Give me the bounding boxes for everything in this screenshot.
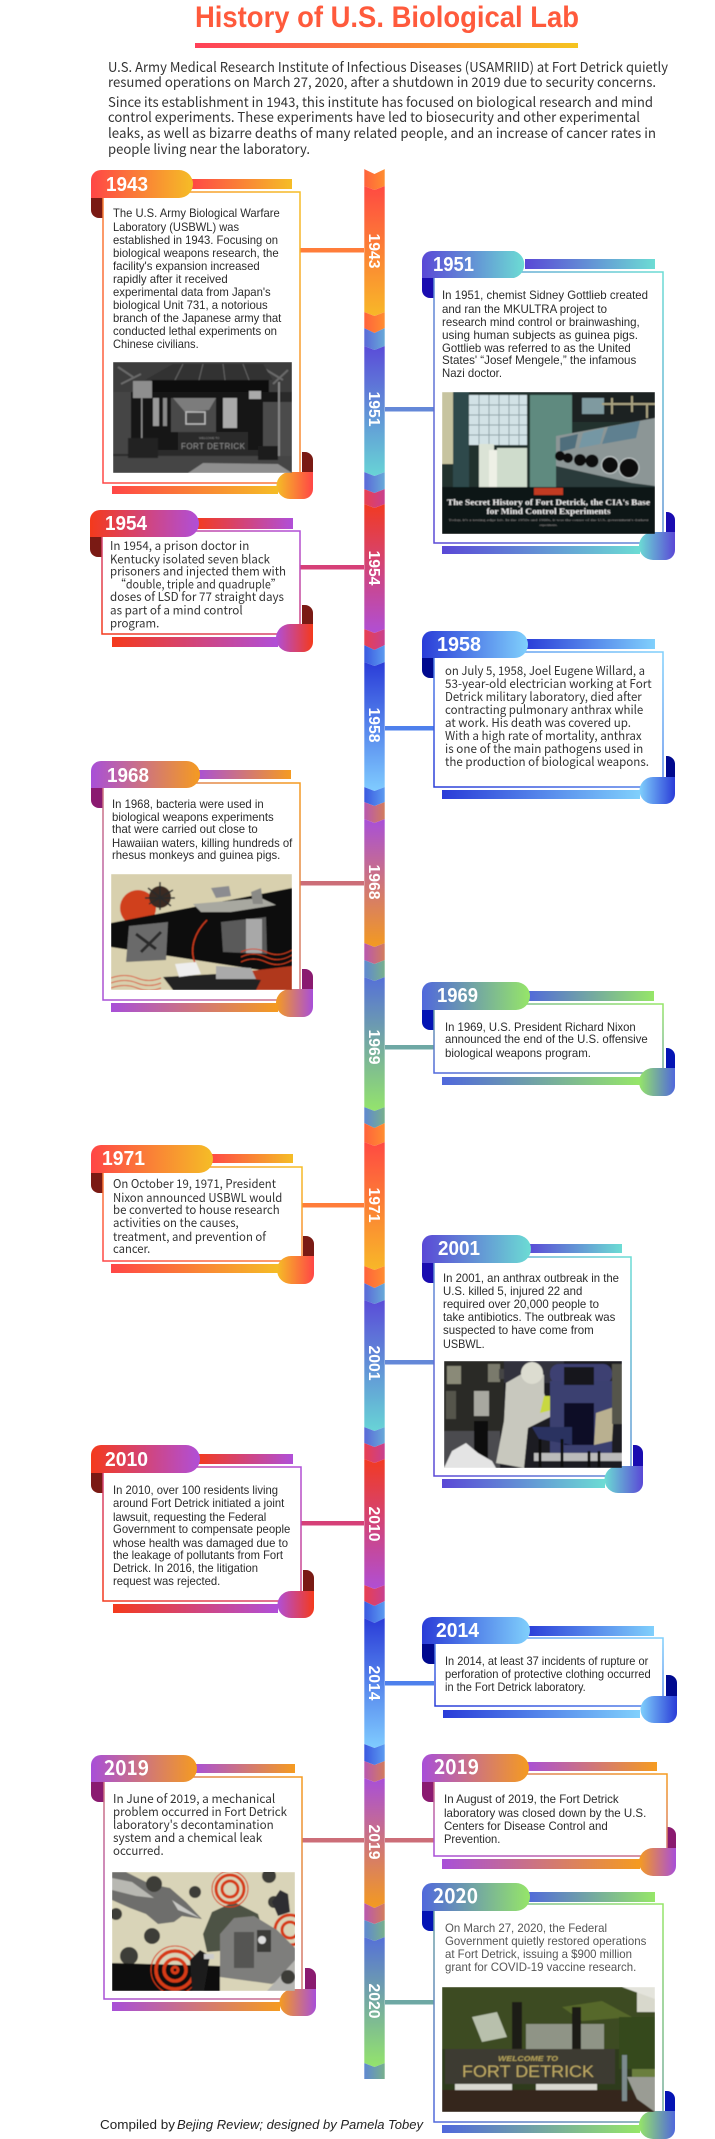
text 1969: announced the end of the U.S. offensive xyxy=(445,1032,648,1046)
text 1951: using human subjects as guinea pigs. xyxy=(442,328,638,342)
text 1958: Detrick military laboratory, died after xyxy=(445,688,642,705)
photo: laboratory glove boxes with headline: for Mind Control Experiments xyxy=(486,507,610,516)
year tab 2020 xyxy=(422,1880,530,1911)
text 2019 right: Centers for Disease Control and xyxy=(444,1819,608,1833)
panel: 1971 xyxy=(91,1145,314,1284)
year tab 1951 xyxy=(422,251,524,278)
intro text: Since its establishment in 1943, this institute has focused on biological research and mind xyxy=(108,91,653,111)
text 1971 xyxy=(113,1175,282,1257)
year tab 2019 left xyxy=(91,1752,197,1782)
text 2001: suspected to have come from xyxy=(443,1323,594,1337)
text 1971: On October 19, 1971, President xyxy=(113,1175,276,1192)
year tab 2014 xyxy=(422,1617,530,1644)
year tab 1954 xyxy=(90,510,199,537)
year tab 1954: 1954 xyxy=(105,513,148,535)
title: History of U.S. Biological Lab xyxy=(195,1,579,34)
text 1971: Nixon announced USBWL would xyxy=(113,1189,282,1206)
photo: laboratory glove boxes with headline: The Secret History of Fort Detrick, the CIA's Base xyxy=(447,498,651,507)
text 2019 left xyxy=(113,1790,287,1859)
panel: 2019 left xyxy=(91,1752,316,2016)
text 1954: Kentucky isolated seven black xyxy=(110,550,270,567)
text 1968: biological weapons experiments xyxy=(112,810,274,824)
text 2014: In 2014, at least 37 incidents of rupture or xyxy=(445,1654,648,1668)
panel: 1969 xyxy=(422,982,675,1096)
text 1958: contracting pulmonary anthrax while xyxy=(445,701,644,718)
year tab 2019 right xyxy=(422,1751,529,1782)
text 2014: perforation of protective clothing occurred xyxy=(445,1667,651,1681)
year tab 1958: 1958 xyxy=(437,634,481,656)
spine segment 2019: 2019 xyxy=(365,1824,382,1860)
year tab 1969 xyxy=(422,982,530,1010)
text 1954: program. xyxy=(110,615,159,632)
text 2010: whose health was damaged due to xyxy=(112,1536,288,1550)
collage: virus, plane and ship xyxy=(111,874,292,990)
spine segment 2010 xyxy=(364,1443,385,1606)
text 1954: In 1954, a prison doctor in xyxy=(110,537,249,554)
panel: 2019 right xyxy=(422,1751,676,1876)
spine segment 1958: 1958 xyxy=(365,708,382,743)
text 2010: Government to compensate people xyxy=(113,1522,291,1536)
text 2010: the leakage of pollutants from Fort xyxy=(113,1548,284,1562)
text 2020: Government quietly restored operations xyxy=(445,1934,646,1948)
spine segment 2019 xyxy=(364,1761,385,1924)
spine segment 1969: 1969 xyxy=(365,1030,382,1065)
text 1951: Gottlieb was referred to as the United xyxy=(442,341,631,355)
photo: Welcome to Fort Detrick sign xyxy=(442,1987,655,2112)
text 1958: With a high rate of mortality, anthrax xyxy=(445,727,642,744)
text 2014 xyxy=(445,1654,651,1694)
text 1943: experimental data from Japan's xyxy=(113,285,271,299)
text 2019 right xyxy=(444,1792,646,1846)
photo: laboratory glove boxes with headline xyxy=(442,392,655,534)
spine segment 2010: 2010 xyxy=(365,1506,382,1542)
spine segment 2001 xyxy=(364,1283,385,1447)
photo: Welcome to Fort Detrick sign: WELCOME TO xyxy=(498,2054,558,2063)
text 1958 xyxy=(445,662,652,770)
text 2014: in the Fort Detrick laboratory. xyxy=(445,1680,586,1694)
spine segment 2020 xyxy=(364,1920,385,2079)
text 2001: In 2001, an anthrax outbreak in the xyxy=(443,1271,619,1285)
panel: 1951 xyxy=(422,251,675,560)
text 1968: rhesus monkeys and guinea pigs. xyxy=(112,848,280,862)
photo: Welcome to Fort Detrick sign: FORT DETRICK xyxy=(462,2062,595,2081)
text 1954: prisoners and injected them with xyxy=(110,563,286,580)
text 2019 left: system and a chemical leak xyxy=(113,1829,263,1846)
text 2010: Detrick. In 2016, the litigation xyxy=(113,1561,258,1575)
text 2019 left: problem occurred in Fort Detrick xyxy=(113,1803,287,1820)
panel: 2020 xyxy=(422,1880,675,2139)
text 1943: facility's expansion increased xyxy=(113,259,260,273)
text 1954 xyxy=(110,537,286,632)
text 2010 xyxy=(112,1483,291,1588)
spine segment 1971 xyxy=(364,1123,385,1288)
text 1969: biological weapons program. xyxy=(445,1046,591,1060)
year tab 1971 xyxy=(91,1145,213,1173)
text 1958: at work. His death was covered up. xyxy=(445,714,631,731)
year tab 1971: 1971 xyxy=(102,1148,145,1170)
text 2001: USBWL. xyxy=(443,1337,485,1351)
text 1951: and ran the MKULTRA project to xyxy=(442,302,607,316)
year tab 1951: 1951 xyxy=(433,254,474,276)
photo: laboratory glove boxes with headline: experiments. xyxy=(540,523,558,527)
year tab 2019 right: 2019 xyxy=(434,1751,479,1780)
spine segment 1951 xyxy=(364,328,385,493)
timeline spine xyxy=(364,169,385,2079)
text 1943: The U.S. Army Biological Warfare xyxy=(113,206,280,220)
text 1943: rapidly after it received xyxy=(113,272,228,286)
spine segment 1954: 1954 xyxy=(365,550,382,586)
text 2001: take antibiotics. The outbreak was xyxy=(443,1310,615,1324)
text 2019 left: In June of 2019, a mechanical xyxy=(113,1790,275,1807)
spine segment 2001: 2001 xyxy=(365,1346,382,1381)
spine segment 1951: 1951 xyxy=(365,392,382,427)
text 2020: at Fort Detrick, issuing a $900 million xyxy=(445,1947,632,1961)
photo: Fort Detrick gate in black and white: WELCOME TO xyxy=(199,436,220,440)
text 1943: branch of the Japanese army that xyxy=(113,311,282,325)
panel: 1943 xyxy=(91,170,313,499)
spine segment 2014 xyxy=(364,1601,385,1765)
text 1971: cancer. xyxy=(113,1240,150,1257)
spine segment 1958 xyxy=(364,645,385,806)
spine segment 1943: 1943 xyxy=(365,234,382,269)
text 1969: In 1969, U.S. President Richard Nixon xyxy=(445,1020,636,1034)
text 2020: grant for COVID-19 vaccine research. xyxy=(445,1960,636,1974)
spine segment 1968 xyxy=(364,802,385,964)
text 1951: Nazi doctor. xyxy=(442,366,502,380)
text 1954: doses of LSD for 77 straight days xyxy=(110,588,284,605)
text 1951: research mind control or brainwashing, xyxy=(442,315,640,329)
year tab 2014: 2014 xyxy=(436,1620,480,1642)
year tab 1968 xyxy=(91,761,200,788)
text 1943: biological Unit 731, a notorious xyxy=(113,298,268,312)
text 1958: on July 5, 1958, Joel Eugene Willard, a xyxy=(445,662,645,679)
text 1943: established in 1943. Focusing on xyxy=(113,233,278,247)
panel: 1954 xyxy=(90,510,313,652)
text 1943: biological weapons research, the xyxy=(113,246,279,260)
photo: laboratory glove boxes with headline: Today, it's a testing edge lab. In the 1950s and 1960s, it was the center of the U.S. government's darkest xyxy=(448,518,649,523)
credit line: Compiled by xyxy=(100,2117,176,2132)
text 2019 right: laboratory was closed down by the U.S. xyxy=(444,1806,646,1820)
text 1943: Laboratory (USBWL) was xyxy=(113,220,239,234)
year tab 2001: 2001 xyxy=(438,1238,480,1260)
intro text: control experiments. These experiments have led to biosecurity and other experimental xyxy=(108,106,640,126)
spine segment 2020: 2020 xyxy=(365,1984,382,2019)
text 1958: is one of the main pathogens used in xyxy=(445,740,643,757)
text 1968: Hawaiian waters, killing hundreds of xyxy=(112,836,293,850)
spine segment 1943 xyxy=(364,169,385,333)
year tab 1958 xyxy=(422,631,528,658)
text 1968: that were carried out close to xyxy=(112,822,258,836)
connector lines xyxy=(300,248,434,2004)
intro text xyxy=(108,56,668,158)
credit line: Bejing Review; designed by Pamela Tobey xyxy=(177,2117,424,2132)
text 1971: activities on the causes, xyxy=(113,1214,239,1231)
text 1971: treatment, and prevention of xyxy=(113,1228,267,1245)
text 2001: U.S. killed 5, injured 22 and xyxy=(443,1284,582,1298)
text 1958: the production of biological weapons. xyxy=(445,753,649,770)
panel: 2010 xyxy=(91,1445,314,1618)
intro text: people living near the laboratory. xyxy=(108,138,310,158)
year tab 2010 xyxy=(91,1445,200,1473)
text 2001: required over 20,000 people to xyxy=(443,1297,599,1311)
text 2019 right: Prevention. xyxy=(444,1832,500,1846)
intro text: U.S. Army Medical Research Institute of Infectious Diseases (USAMRIID) at Fort Detrick quietly xyxy=(108,56,668,76)
intro text: leaks, as well as bizarre deaths of many related people, and an increase of cancer rates in xyxy=(108,122,656,142)
text 1958: 53-year-old electrician working at Fort xyxy=(445,675,652,692)
text 1943: Chinese civilians. xyxy=(113,337,199,351)
text 1954: as part of a mind control xyxy=(110,601,243,618)
year tab 1968: 1968 xyxy=(107,765,149,787)
year tab 1969: 1969 xyxy=(437,985,478,1007)
panel: 1958 xyxy=(422,631,675,804)
spine segment 1971: 1971 xyxy=(365,1188,382,1223)
text 1954: “double, triple and quadruple” xyxy=(115,575,282,592)
text 2019 right: In August of 2019, the Fort Detrick xyxy=(444,1792,620,1806)
text 1943 xyxy=(113,206,282,351)
text 2019 left: occurred. xyxy=(113,1842,164,1859)
year tab 1943: 1943 xyxy=(106,174,148,196)
year tab 2010: 2010 xyxy=(105,1449,148,1471)
text 1951: States' “Josef Mengele,” the infamous xyxy=(442,353,636,367)
year tab 2020: 2020 xyxy=(433,1880,478,1909)
text 2001 xyxy=(443,1271,619,1351)
spine segment 2014: 2014 xyxy=(365,1666,382,1701)
spine segment 1954 xyxy=(364,489,385,650)
title underline xyxy=(195,43,578,48)
text 2010: around Fort Detrick initiated a joint xyxy=(113,1496,285,1510)
photo: hazmat worker at a mailbox xyxy=(444,1361,622,1468)
text 2010: lawsuit, requesting the Federal xyxy=(113,1510,266,1524)
text 2020: On March 27, 2020, the Federal xyxy=(445,1921,607,1935)
text 1968 xyxy=(112,797,293,862)
panel: 1968 xyxy=(91,761,313,1017)
year tab 2001 xyxy=(422,1235,531,1263)
intro text: resumed operations on March 27, 2020, after a shutdown in 2019 due to security concerns. xyxy=(108,71,656,91)
panel: 2001 xyxy=(422,1235,643,1493)
spine segment 1969 xyxy=(364,960,385,1128)
text 2010: In 2010, over 100 residents living xyxy=(113,1483,278,1497)
year tab 1943 xyxy=(91,170,193,198)
text 1943: conducted lethal experiments on xyxy=(113,324,277,338)
year tab 2019 left: 2019 xyxy=(104,1752,149,1781)
text 2020 xyxy=(445,1921,646,1974)
collage: pointing hand, train and targets xyxy=(112,1872,295,1991)
text 1969 xyxy=(445,1020,648,1060)
text 1971: be converted to house research xyxy=(113,1201,280,1218)
text 1951 xyxy=(442,288,648,380)
text 2019 left: laboratory's decontamination xyxy=(113,1816,274,1833)
photo: Fort Detrick gate in black and white xyxy=(113,362,292,473)
spine segment 1968: 1968 xyxy=(365,864,382,900)
text 1968: In 1968, bacteria were used in xyxy=(112,797,264,811)
text 2010: request was rejected. xyxy=(113,1574,220,1588)
photo: Fort Detrick gate in black and white: FORT DETRICK xyxy=(181,442,246,451)
text 1951: In 1951, chemist Sidney Gottlieb created xyxy=(442,288,648,302)
panel: 2014 xyxy=(422,1617,677,1723)
